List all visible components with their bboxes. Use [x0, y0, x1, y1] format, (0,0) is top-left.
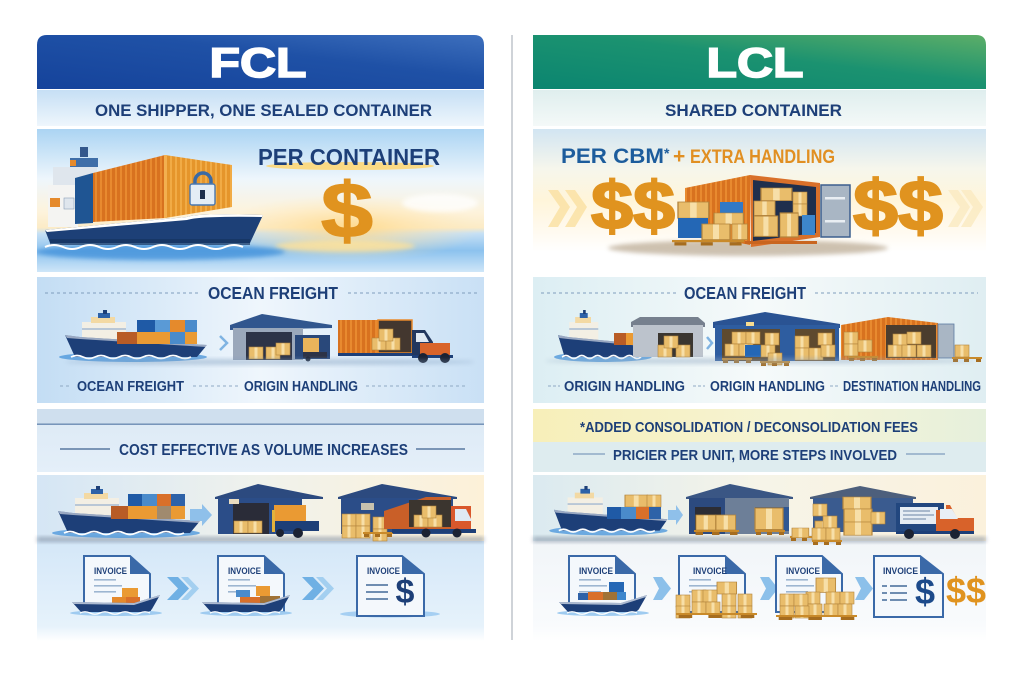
subheading: shared container: SHARED CONTAINER: [665, 102, 842, 120]
chevron: [653, 577, 671, 600]
label: origin handling: ORIGIN HANDLING: [710, 379, 825, 395]
icon: loaded ship: [52, 486, 200, 538]
ground shadow: [545, 358, 975, 364]
shadow: [608, 240, 888, 256]
LCL header: LCL: [706, 39, 804, 86]
chevrons right: [948, 190, 983, 227]
icon: open container with cartons: [672, 175, 850, 247]
icon: dollar sign: $: [321, 166, 373, 254]
icon: ship: [549, 486, 668, 535]
invoice with ship: INVOICE: [228, 566, 261, 577]
ground shadow: [65, 359, 475, 365]
panel: logistics and invoices: [37, 475, 484, 641]
subheading: shared container: [533, 90, 986, 126]
label: origin handling: ORIGIN HANDLING: [564, 379, 685, 395]
chevron: [855, 577, 873, 600]
icon: container ship with padlock: [45, 147, 263, 249]
banner: pricier per unit: [533, 442, 986, 472]
arrow: [220, 336, 227, 350]
icon: delivery truck: [338, 320, 453, 363]
chevron arrows: [167, 577, 199, 600]
highlight underline: [266, 162, 434, 170]
icon: ship: [554, 310, 652, 362]
invoice with pallets: INVOICE: [786, 566, 820, 577]
icon: warehouse with forklift: [215, 484, 323, 538]
chevron arrows: [302, 577, 334, 600]
panel: FCL column: [35, 35, 484, 641]
FCL header: [37, 35, 484, 89]
orange dollars: $$: [946, 570, 986, 611]
dollars right: $$: [853, 167, 943, 246]
invoice with dollar: [874, 556, 943, 617]
label: origin handling: ORIGIN HANDLING: [244, 379, 358, 395]
invoice with pallets: [776, 556, 857, 620]
pricing label: PER CONTAINER: [258, 144, 440, 170]
invoice with dollar: $: [396, 573, 415, 611]
panel: cost breakdown: [37, 277, 484, 403]
pricing label: [561, 145, 835, 168]
invoice with dollar: INVOICE: [367, 566, 400, 577]
LCL header: [533, 35, 986, 89]
hero panel: per container pricing: [35, 129, 484, 272]
banner: added fees: *ADDED CONSOLIDATION / DECONSOLIDATION FEES: [580, 419, 918, 436]
label: ocean freight: OCEAN FREIGHT: [77, 379, 184, 395]
invoice with dollar: INVOICE: [883, 566, 918, 577]
pricing label: PER CBM: [561, 145, 664, 168]
hero panel: per CBM pricing: [533, 129, 986, 272]
invoice with ship: INVOICE: [94, 566, 127, 577]
chevron: [760, 577, 778, 600]
icon: large warehouse: [713, 312, 840, 366]
arrow: [668, 505, 683, 525]
icon: warehouse: [230, 314, 332, 362]
invoice with ship: INVOICE: [579, 566, 613, 577]
icon: warehouse with cartons: [686, 484, 793, 535]
icon: small warehouse: [631, 317, 705, 357]
invoice with dollar: $: [915, 571, 935, 612]
label: destination handling: DESTINATION HANDLING: [843, 379, 981, 395]
centre divider: [511, 35, 513, 640]
pricing label: EXTRA HANDLING: [690, 146, 835, 168]
icon: loaded ship: [59, 310, 207, 362]
banner: cost effective: [37, 409, 484, 472]
icon: open container: [841, 317, 982, 362]
chevrons left: [548, 190, 587, 227]
panel: cost breakdown: [533, 277, 986, 403]
heading: ocean freight: OCEAN FREIGHT: [684, 283, 806, 303]
icon: warehouse with cartons and truck: [790, 486, 974, 545]
panel: logistics and invoices: [533, 475, 986, 641]
FCL header: FCL: [210, 39, 306, 86]
pricing label: +: [673, 145, 685, 168]
subheading: one shipper: [37, 90, 484, 126]
arrow: [707, 337, 712, 349]
dollars left: $$: [591, 168, 675, 244]
invoice with ship: [200, 556, 292, 616]
panel: LCL column: [533, 35, 986, 641]
banner: cost effective: COST EFFECTIVE AS VOLUME INCREASES: [119, 442, 408, 459]
arrow: [190, 504, 212, 526]
invoice with pallets: INVOICE: [693, 566, 727, 577]
banner: pricier per unit: PRICIER PER UNIT, MORE STEPS INVOLVED: [613, 447, 897, 464]
invoice with dollar: [340, 556, 440, 618]
subheading: one shipper: ONE SHIPPER, ONE SEALED CONTAINER: [95, 102, 432, 120]
invoice with ship: [557, 556, 649, 616]
invoice with ship: [70, 556, 162, 616]
icon: warehouse with truck: [338, 484, 476, 541]
invoice with pallets: [676, 556, 757, 618]
banner: added fees: [533, 409, 986, 442]
heading: ocean freight: OCEAN FREIGHT: [208, 283, 338, 303]
pricing label: *: [664, 145, 670, 161]
